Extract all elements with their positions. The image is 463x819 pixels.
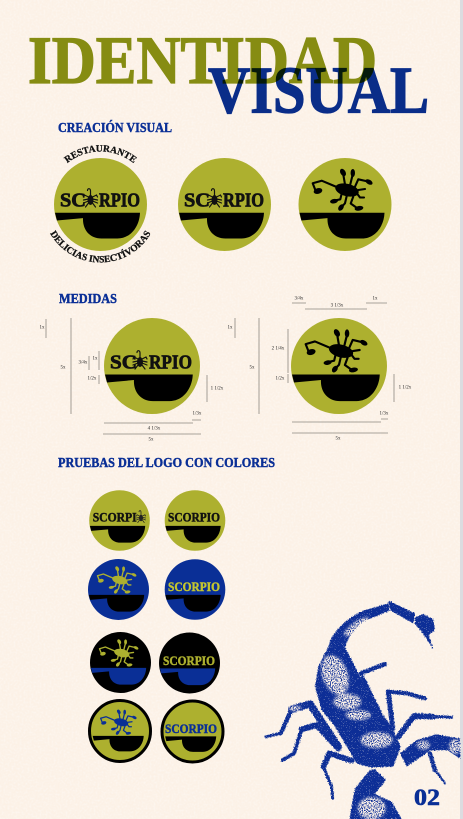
logo with wordmark [178,158,271,251]
logo with curved text: RESTAURANTE [64,145,137,164]
colour test: ringed olive with blue scorpion [90,700,150,762]
logo with wordmark: SC [184,190,210,212]
logo with wordmark: RPIO [223,190,264,212]
panel: measured wordmark logo: 1 1/2x [211,386,224,392]
title [28,22,429,128]
panel: measured icon logo: 2 1/4x [272,346,285,352]
heading: pruebas del logo con colores: PRUEBAS DEL LOGO CON COLORES [58,456,275,471]
colour test: black wordmark: SCORPIO [163,653,215,668]
panel: logo colour tests [88,490,225,762]
panel: measured wordmark logo: 3/4x [79,360,88,366]
panel: measured wordmark logo: 1/3x [193,412,202,416]
logo with scorpion icon [298,158,392,251]
colour test: black wordmark [159,632,220,694]
colour test: ringed olive with blue wordmark: SCORPIO [165,721,217,736]
illustration: blue engraved scorpion [266,601,461,819]
panel: measured icon logo [228,296,412,442]
panel: measured icon logo: 1/2x [276,376,285,382]
colour test: blue wordmark [165,559,225,620]
colour test: olive with scorpion letter: SCORPI [93,510,137,525]
panel: measured wordmark logo: 4 1/3x [148,426,161,432]
colour test: olive wordmark: SCORPIO [168,510,220,525]
page number: 02 [414,785,440,810]
panel: measured icon logo: 5x [336,436,341,442]
panel: measured wordmark logo: 5x [148,438,154,442]
colour test: blue with scorpion [88,559,149,620]
logo with curved text: RPIO [99,190,140,212]
panel: measured icon logo: 3 1/3x [331,304,344,308]
colour test: olive wordmark [165,490,225,551]
colour test: ringed olive with blue wordmark [162,701,223,762]
panel: measured icon logo: 1 1/2x [399,386,412,390]
panel: measured icon logo: 1x [228,326,233,330]
scorpion highlights [289,614,461,819]
colour test: blue wordmark: SCORPIO [168,579,220,594]
heading: creación visual: CREACIÓN VISUAL [58,119,172,136]
panel: measured icon logo: 1x [372,296,378,302]
panel: measured icon logo: 5x [250,366,255,370]
panel: measured wordmark logo: SC [110,352,137,374]
logo with curved text: SC [60,190,86,212]
colour test: black with scorpion [90,632,151,693]
title word: VISUAL: VISUAL [208,54,429,128]
logo with curved text [50,145,150,263]
panel: measured wordmark logo: RPIO [149,352,192,374]
logo with curved text: DELICIAS INSECTÍVORAS [50,230,150,263]
panel: measured wordmark logo: 1/2x [88,376,97,382]
panel: measured wordmark logo [40,318,224,442]
panel: creación visual logos [50,145,392,263]
panel: measured wordmark logo: 1x [40,326,45,330]
colour test: olive with scorpion letter [89,490,150,551]
title word: IDENTIDAD: IDENTIDAD [28,22,377,98]
panel: measured icon logo: 1/3x [380,412,389,416]
heading: medidas: MEDIDAS [59,292,117,307]
panel: measured wordmark logo: 1x [92,356,98,362]
panel: measured icon logo: 3/4x [295,296,304,302]
panel: measured wordmark logo: 5x [60,366,66,370]
